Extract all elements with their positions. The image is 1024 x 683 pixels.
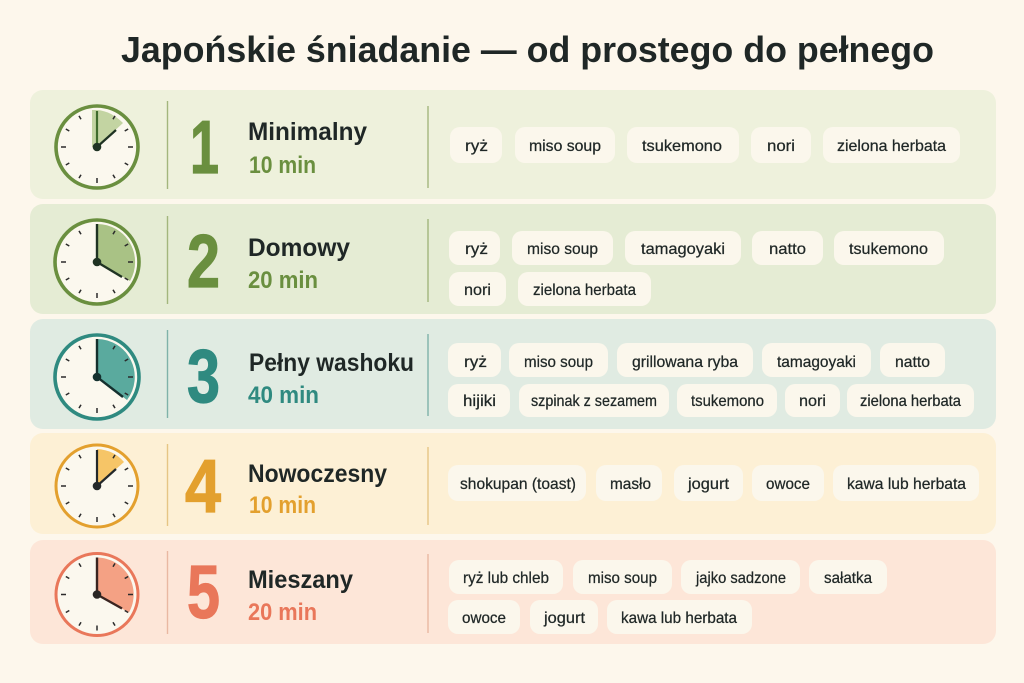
chips [448, 560, 887, 634]
chips: miso soup [588, 570, 657, 587]
name: Domowy [248, 234, 350, 262]
panel: 2 Domowy [30, 204, 996, 314]
chips: tsukemono [691, 393, 764, 410]
chips [448, 343, 974, 417]
chips: jajko sadzone [695, 570, 786, 587]
chips [448, 465, 979, 501]
chips: szpinak z sezamem [531, 393, 657, 410]
panel: 1 Minimalny [30, 90, 996, 199]
time: 10 min [249, 152, 316, 179]
chips: natto [769, 241, 806, 258]
time: 20 min [248, 599, 317, 626]
chips: nori [464, 282, 491, 299]
chips: miso soup [529, 138, 601, 155]
chips: natto [895, 354, 930, 371]
chips [449, 231, 944, 306]
panel: 4 Nowoczesny [30, 433, 996, 534]
number 4: 4 [185, 444, 221, 528]
panel: 3 Pełny washoku [30, 319, 996, 429]
icon: clock 10 min [56, 445, 138, 527]
chips: sałatka [824, 570, 872, 587]
number 5: 5 [187, 550, 220, 634]
chips: hijiki [463, 393, 496, 410]
chips: kawa lub herbata [621, 610, 737, 627]
chips: shokupan (toast) [460, 476, 576, 493]
icon: clock 20 min [56, 554, 138, 636]
chips: tsukemono [849, 241, 928, 258]
chips: zielona herbata [837, 138, 946, 155]
chips: zielona herbata [533, 282, 636, 299]
chips [450, 127, 960, 163]
chips: miso soup [527, 241, 598, 258]
chips: kawa lub herbata [847, 476, 966, 493]
chips: nori [767, 138, 795, 155]
chips: zielona herbata [860, 393, 961, 410]
chips: masło [610, 476, 651, 493]
chips: tamagoyaki [777, 354, 856, 371]
number 2: 2 [187, 219, 220, 303]
name: Mieszany [248, 566, 353, 594]
number 3: 3 [187, 334, 220, 418]
chips: grillowana ryba [632, 354, 738, 371]
chips: ryż [465, 241, 488, 258]
number 1: 1 [190, 105, 219, 189]
icon: clock 40 min [55, 335, 139, 419]
time: 20 min [248, 267, 318, 294]
chips: tamagoyaki [641, 241, 725, 258]
time: 10 min [249, 492, 316, 519]
chips: tsukemono [642, 138, 722, 155]
chips: jogurt [687, 476, 730, 493]
name: Pełny washoku [249, 349, 414, 377]
chips: jogurt [543, 610, 586, 627]
name: Nowoczesny [248, 460, 387, 488]
panel: 5 Mieszany [30, 540, 996, 644]
title: Japońskie śniadanie — od prostego do pełnego [121, 29, 934, 70]
chips: nori [799, 393, 826, 410]
chips: ryż lub chleb [463, 570, 549, 587]
icon: clock 10 min [56, 106, 138, 188]
chips: miso soup [524, 354, 593, 371]
icon: clock 20 min [55, 220, 139, 304]
chips: ryż [464, 354, 487, 371]
chips: owoce [766, 476, 810, 493]
chips: owoce [462, 610, 506, 627]
chips: ryż [465, 138, 488, 155]
name: Minimalny [248, 118, 367, 146]
time: 40 min [248, 382, 319, 409]
